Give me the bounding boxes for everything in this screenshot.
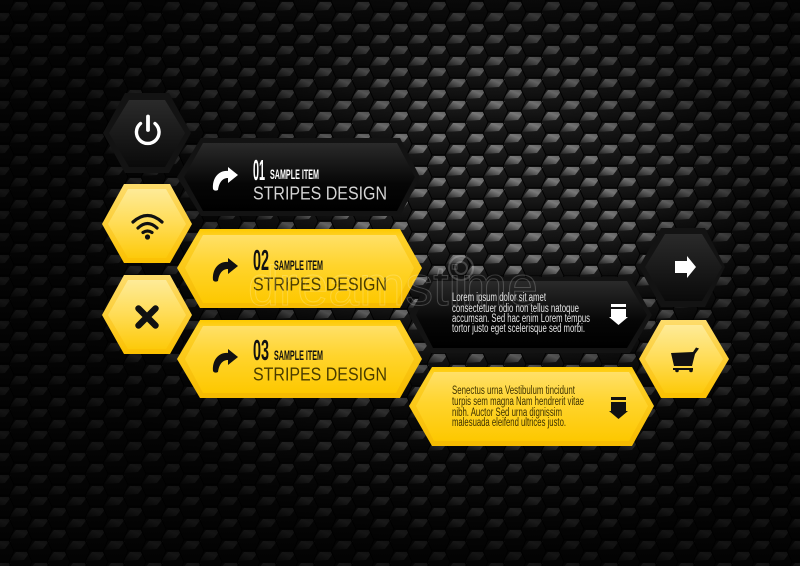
label: sample item: SAMPLE ITEM <box>274 257 323 273</box>
label: stripes design: STRIPES DESIGN <box>253 184 387 204</box>
label: sample item: SAMPLE ITEM <box>270 166 319 182</box>
strip 03 yellow <box>177 320 422 398</box>
label: stripes design: STRIPES DESIGN <box>253 364 387 384</box>
text block: lorem: consectetuer odio non tellus natoque <box>452 303 579 315</box>
icon: wifi <box>133 216 162 240</box>
text block: lorem: Lorem ipsum dolor sit amet <box>452 292 547 304</box>
strip 02 yellow <box>177 229 422 308</box>
strip: yellow text block <box>409 367 654 446</box>
text block: lorem <box>452 292 590 335</box>
text block: senectus: malesuada eleifend ultrices justo. <box>452 417 566 429</box>
icon: down arrow <box>609 397 628 419</box>
strip 03 yellow: 03 <box>253 335 269 367</box>
hexagon: wifi <box>102 184 192 263</box>
icon: curved arrow <box>213 167 238 191</box>
strip 01 dark <box>177 138 420 216</box>
label: sample item: SAMPLE ITEM <box>274 347 323 363</box>
icon: curved arrow <box>213 258 238 282</box>
icon: down arrow <box>609 304 628 325</box>
hexagon: close <box>102 275 192 354</box>
icon: right arrow <box>675 256 696 278</box>
icon: cart <box>671 348 699 372</box>
text block: senectus: turpis sem magna Nam hendrerit vitae <box>452 396 584 408</box>
text block: senectus: Senectus urna Vestibulum tincidunt <box>452 385 576 397</box>
icon: cross <box>138 308 156 326</box>
text block: lorem: accumsan. Sed hac enim Lorem tempus <box>452 313 590 325</box>
strip 01 dark: 01 <box>253 155 265 187</box>
strip 02 yellow: 02 <box>253 245 269 277</box>
text block: lorem: tortor justo eget scelerisque sed morbi. <box>452 323 585 335</box>
watermark: dreamstime <box>248 254 538 317</box>
icon: power <box>136 116 159 143</box>
hexagon: cart <box>639 320 729 398</box>
icon: curved arrow <box>213 349 238 373</box>
label: stripes design: STRIPES DESIGN <box>253 274 387 294</box>
text block: senectus: nibh. Auctor Sed urna dignissim <box>452 407 562 419</box>
strip: dark text block <box>409 277 652 353</box>
text block: senectus <box>452 385 584 429</box>
hexagon: power <box>103 93 191 173</box>
hexagon: right arrow <box>639 228 725 307</box>
